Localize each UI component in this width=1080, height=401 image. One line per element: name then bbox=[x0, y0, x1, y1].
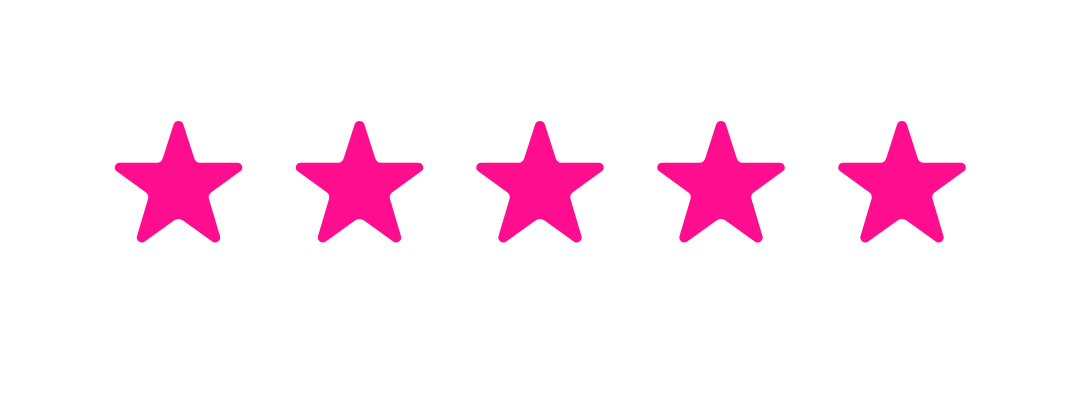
icon: star 3 bbox=[476, 121, 604, 242]
icon: star 4 bbox=[657, 121, 785, 242]
icon: star 5 bbox=[838, 121, 966, 242]
icon: star 2 bbox=[296, 121, 423, 242]
icon: star 1 bbox=[115, 121, 242, 242]
